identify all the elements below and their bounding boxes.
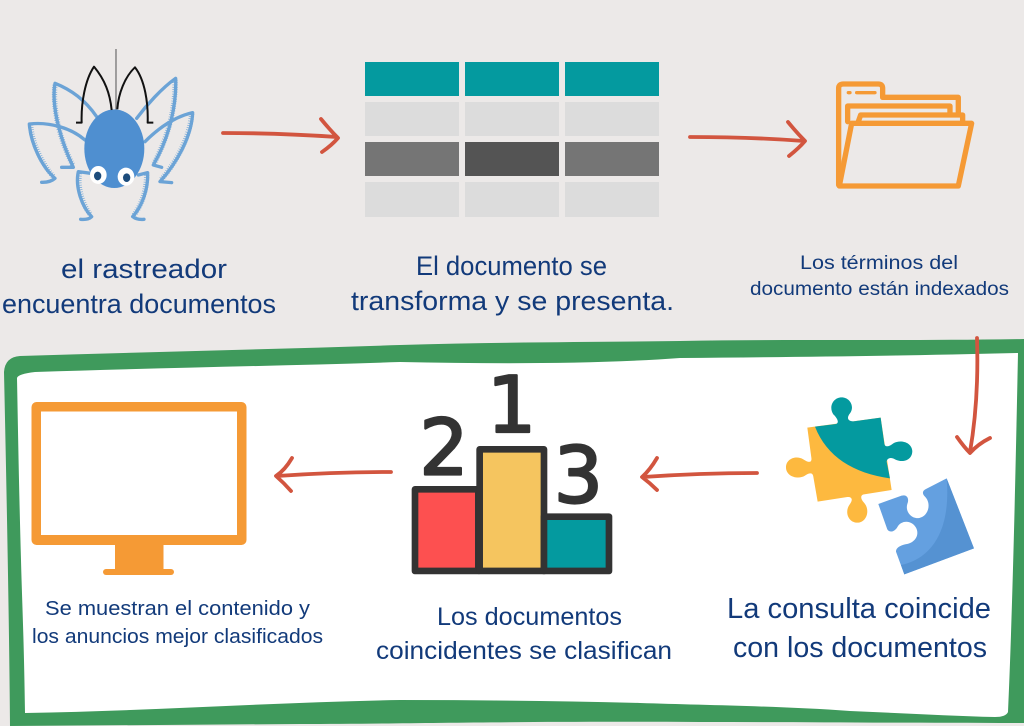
- icon: puzzle pieces: [786, 397, 974, 574]
- text: step 2 caption: transforma y se presenta.: [351, 286, 674, 316]
- arrow: step 3 to step 4: [957, 338, 990, 453]
- icon: ranking podium: 2: [419, 403, 469, 493]
- text: step 1 caption: encuentra documentos: [2, 289, 276, 319]
- text: step 3 caption: Los términos del: [800, 253, 958, 274]
- text: step 4 caption: [727, 593, 991, 664]
- arrow: step 5 to step 6: [276, 458, 391, 491]
- text: step 3 caption: documento están indexados: [750, 279, 1009, 300]
- icon: yellow and teal joined puzzle piece: [786, 397, 912, 523]
- text: step 4 caption: con los documentos: [733, 632, 987, 664]
- text: step 5 caption: coincidentes se clasifican: [376, 637, 672, 665]
- arrow: step 4 to step 5: [642, 458, 757, 490]
- icon: ranking podium: 3: [554, 432, 603, 522]
- text: step 3 caption: [750, 253, 1009, 300]
- text: step 2 caption: El documento se: [416, 251, 607, 281]
- text: step 2 caption: [351, 251, 674, 316]
- text: step 1 caption: el rastreador: [61, 254, 227, 284]
- text: step 4 caption: La consulta coincide: [727, 593, 991, 625]
- text: step 6 caption: los anuncios mejor clasificados: [32, 626, 323, 648]
- icon: ranking podium: [415, 361, 609, 571]
- text: step 5 caption: [376, 603, 672, 665]
- arrow: step 2 to step 3: [690, 122, 805, 156]
- table: transformed document: [365, 62, 659, 217]
- icon: spider crawler: [29, 49, 193, 219]
- text: step 6 caption: Se muestran el contenido y: [45, 598, 310, 620]
- text: step 1 caption: [2, 254, 276, 319]
- text: step 5 caption: Los documentos: [437, 603, 622, 631]
- icon: folder: [839, 84, 972, 186]
- arrow: step 1 to step 2: [223, 119, 338, 152]
- icon: computer monitor: [32, 402, 246, 575]
- panel: green framed results area: [4, 339, 1024, 726]
- icon: ranking podium: 1: [487, 361, 536, 451]
- text: step 6 caption: [32, 598, 323, 648]
- icon: blue puzzle piece: [878, 478, 974, 574]
